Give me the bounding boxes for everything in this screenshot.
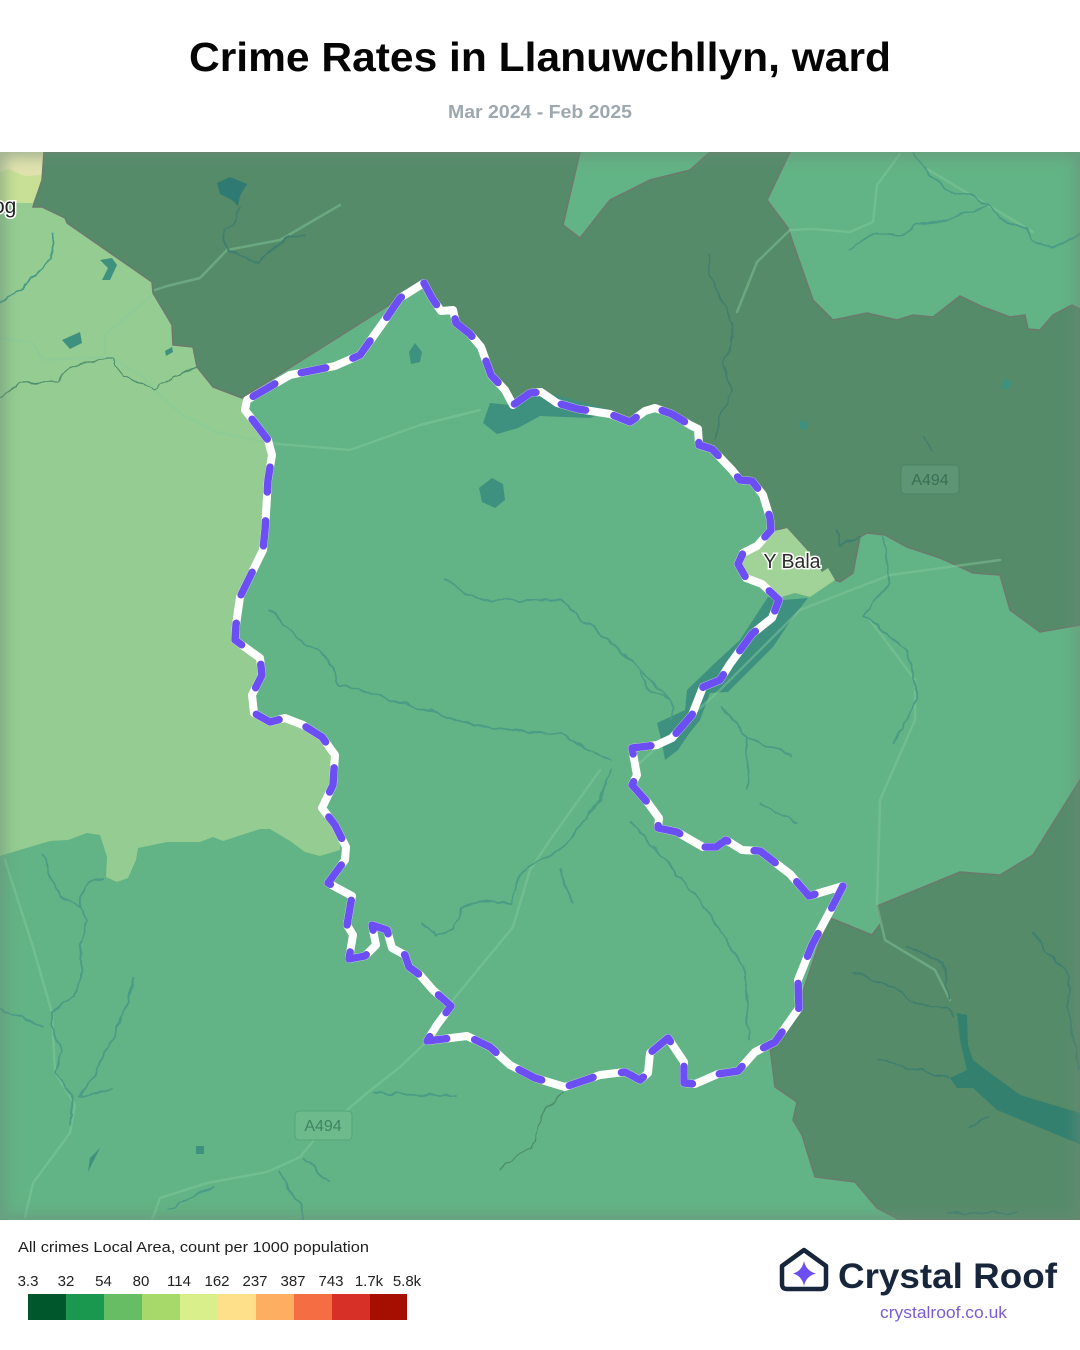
legend scale labels: 387: [280, 1273, 306, 1290]
road label: A494 east: [901, 465, 959, 494]
title: Crime Rates in Llanuwchllyn, ward: [189, 34, 891, 80]
legend title: All crimes Local Area, count per 1000 population: [18, 1239, 369, 1256]
choropleth map: [0, 148, 1080, 1224]
logo: Crystal Roof: [782, 1250, 1057, 1322]
legend scale labels: 3.3: [18, 1273, 38, 1290]
region: Y Bala light green: [738, 528, 835, 598]
legend scale labels: 1.7k: [355, 1273, 384, 1290]
lake: northwest tarn: [217, 177, 247, 206]
ward boundary: white base with purple dashes: [235, 283, 843, 1087]
region: dark green southeast: [770, 780, 1080, 1220]
legend: [18, 1239, 422, 1320]
website link: crystalroof.co.uk: [880, 1304, 1008, 1322]
legend scale labels: 237: [242, 1273, 268, 1290]
legend scale labels: 80: [133, 1273, 149, 1290]
rivers: [0, 152, 1080, 1220]
legend scale labels: 32: [58, 1273, 74, 1290]
legend scale labels: 743: [318, 1273, 344, 1290]
region: dark green north and east: [33, 152, 1080, 632]
legend scale labels: 114: [167, 1273, 191, 1290]
rivers in dark areas: [0, 207, 1080, 1213]
region: light green west: [0, 203, 345, 882]
road label: A494 south: A494: [304, 1118, 342, 1135]
road label: A494 south: [295, 1111, 352, 1140]
region: ward fill: [239, 314, 795, 1011]
legend colour bar: [28, 1294, 407, 1320]
region edge fade: [0, 148, 1080, 1224]
road label: A494 east: A494: [911, 472, 949, 489]
place label: Y Bala: Y Bala: [764, 551, 821, 573]
lakes: [62, 258, 1012, 1172]
legend scale labels: 54: [95, 1273, 112, 1290]
legend scale labels: 162: [204, 1273, 230, 1290]
roads: [0, 154, 1033, 1220]
icon: house with star: [782, 1250, 826, 1289]
lake: southeast reservoir: [950, 1013, 1080, 1145]
region: pale yellow corner: [0, 152, 44, 176]
logo wordmark: Crystal Roof: [838, 1257, 1057, 1296]
legend scale labels: 5.8k: [393, 1273, 422, 1290]
subtitle: date range: Mar 2024 - Feb 2025: [448, 102, 632, 122]
region: yellow-green northwest corner: [0, 169, 42, 203]
legend scale labels: [18, 1273, 422, 1290]
